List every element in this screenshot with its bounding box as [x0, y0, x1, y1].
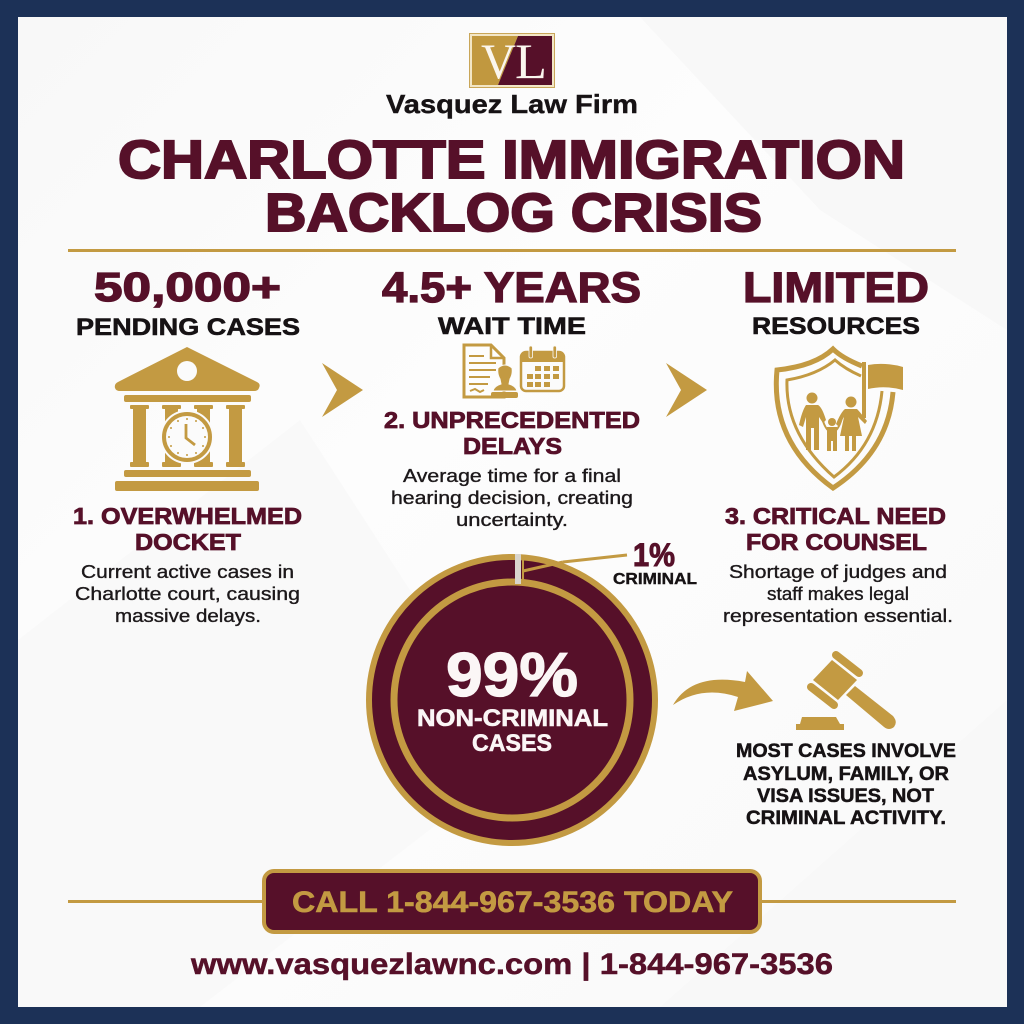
arrow: column 1 to 2 — [322, 363, 363, 417]
logo: VL monogram: L — [515, 33, 547, 89]
99% label: CASES — [472, 730, 552, 757]
call to action banner: CALL 1-844-967-3536 TODAY — [292, 886, 733, 919]
stat: limited resources — [743, 264, 929, 340]
text block: most cases note: CRIMINAL ACTIVITY. — [746, 808, 946, 829]
99% label: NON-CRIMINAL — [417, 705, 608, 732]
title divider — [68, 249, 956, 252]
heading: overwhelmed docket: DOCKET — [135, 529, 241, 555]
label: 1% criminal: 1% — [633, 537, 675, 573]
stat: limited resources: LIMITED — [743, 264, 929, 312]
heading: critical need for counsel: 3. CRITICAL NEED — [725, 503, 946, 529]
callout line: 1% criminal — [563, 555, 627, 562]
description: representation essential. — [723, 606, 953, 626]
heading: overwhelmed docket: 1. OVERWHELMED — [73, 503, 302, 529]
description — [391, 466, 633, 530]
label: 1% criminal — [613, 537, 697, 588]
1% gap marker — [515, 554, 521, 584]
arrow: column 2 to 3 — [666, 363, 707, 417]
heading: critical need for counsel — [725, 503, 946, 555]
stat: limited resources: RESOURCES — [752, 313, 920, 340]
firm name: Vasquez Law Firm — [386, 89, 638, 119]
description: uncertainty. — [456, 510, 568, 530]
description: staff makes legal — [767, 584, 909, 604]
column 1: overwhelmed docket — [73, 264, 302, 626]
heading: unprecedented delays: 2. UNPRECEDENTED — [384, 407, 640, 433]
stat: 50,000+ pending cases: PENDING CASES — [76, 314, 300, 341]
text block: most cases note: MOST CASES INVOLVE — [736, 741, 956, 762]
stat: 4.5+ years wait time — [382, 264, 641, 340]
icon: courthouse with clock — [115, 347, 260, 491]
title — [118, 130, 905, 243]
heading: overwhelmed docket — [73, 503, 302, 555]
heading: unprecedented delays — [384, 407, 640, 459]
arrow: curved, to gavel — [673, 671, 773, 711]
label: 1% criminal: CRIMINAL — [613, 571, 697, 588]
description — [723, 562, 953, 626]
logo: VL monogram — [470, 33, 554, 89]
description: Current active cases in — [81, 562, 294, 582]
description — [75, 562, 300, 626]
stat: 50,000+ pending cases — [76, 264, 300, 341]
call to action banner — [68, 871, 956, 932]
icon: document and stamp — [464, 345, 518, 398]
description: Average time for a final — [403, 466, 621, 486]
text block: most cases note: VISA ISSUES, NOT — [757, 786, 934, 807]
description: massive delays. — [115, 606, 261, 626]
title: CHARLOTTE IMMIGRATION — [118, 130, 905, 190]
icon: gavel — [796, 655, 896, 730]
icon: calendar — [521, 346, 564, 391]
column 3: critical need for counsel — [723, 264, 953, 626]
icon: shield with family and flag — [776, 349, 903, 488]
donut chart: 99% non-criminal vs 1% criminal — [369, 554, 655, 843]
description: Shortage of judges and — [729, 562, 947, 582]
text block: most cases note — [736, 741, 956, 829]
footer contact line: www.vasquezlawnc.com | 1-844-967-3536 — [190, 948, 833, 981]
99% label — [417, 641, 608, 757]
description: Charlotte court, causing — [75, 584, 300, 604]
stat: 4.5+ years wait time: 4.5+ YEARS — [382, 264, 641, 312]
heading: unprecedented delays: DELAYS — [463, 433, 562, 459]
stat: 50,000+ pending cases: 50,000+ — [94, 264, 281, 310]
column 2: unprecedented delays — [382, 264, 641, 530]
description: hearing decision, creating — [391, 488, 633, 508]
title: BACKLOG CRISIS — [265, 183, 762, 243]
stat: 4.5+ years wait time: WAIT TIME — [438, 313, 586, 340]
99% label: 99% — [446, 641, 578, 710]
text block: most cases note: ASYLUM, FAMILY, OR — [743, 764, 949, 785]
logo: VL monogram: V — [481, 33, 516, 89]
heading: critical need for counsel: FOR COUNSEL — [746, 529, 927, 555]
